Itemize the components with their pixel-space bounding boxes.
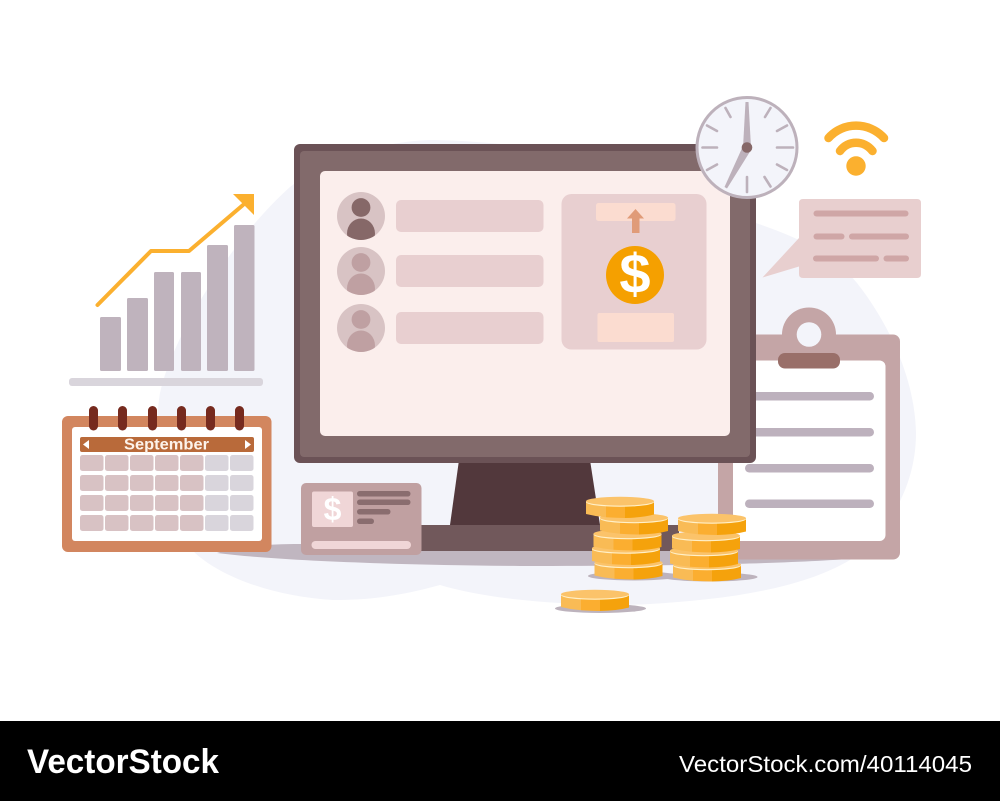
- background blob: [157, 140, 916, 605]
- right coin stack: [662, 514, 758, 582]
- monitor stand: [450, 460, 600, 525]
- watermark logo text: VectorStock: [27, 743, 219, 781]
- desktop monitor: [294, 144, 756, 551]
- calendar month header: [80, 436, 254, 454]
- payment card: [301, 483, 422, 555]
- clipboard clip: [778, 308, 840, 368]
- single coin: [555, 590, 646, 613]
- monitor screen: [320, 171, 730, 436]
- chart baseline: [69, 378, 263, 386]
- ground shadow: [217, 544, 862, 566]
- dollar coin: [606, 242, 664, 305]
- calendar month header: September: [124, 436, 209, 454]
- card strip: [312, 541, 411, 549]
- wifi icon: [828, 126, 884, 176]
- wall clock: [697, 98, 797, 198]
- user list row 3: [337, 304, 544, 352]
- footer watermark bar: [0, 721, 1000, 801]
- monitor frame: [294, 144, 756, 463]
- growth arrow: [98, 194, 254, 305]
- payment panel: [562, 194, 706, 350]
- clipboard text lines: [745, 392, 874, 508]
- clock tick marks: [702, 108, 793, 192]
- clipboard: [718, 308, 900, 560]
- calendar: [62, 406, 272, 552]
- user list row 1: [337, 192, 544, 240]
- card dollar box: $: [324, 491, 342, 527]
- clock hands: [724, 102, 751, 188]
- dollar coin: $: [619, 242, 651, 305]
- user list row 2: [337, 247, 544, 295]
- speech bubble: [762, 199, 921, 278]
- calendar binding rings: [89, 406, 244, 430]
- chart bars: [100, 225, 254, 371]
- monitor base: [400, 525, 679, 551]
- left coin stack: [586, 497, 680, 580]
- upload arrow: [627, 209, 644, 233]
- bar chart with growth arrow: [69, 194, 263, 386]
- calendar day cells: [80, 455, 254, 531]
- watermark url: VectorStock.com/40114045: [679, 751, 972, 777]
- bubble text lines: [813, 210, 909, 262]
- card text lines: [357, 491, 410, 524]
